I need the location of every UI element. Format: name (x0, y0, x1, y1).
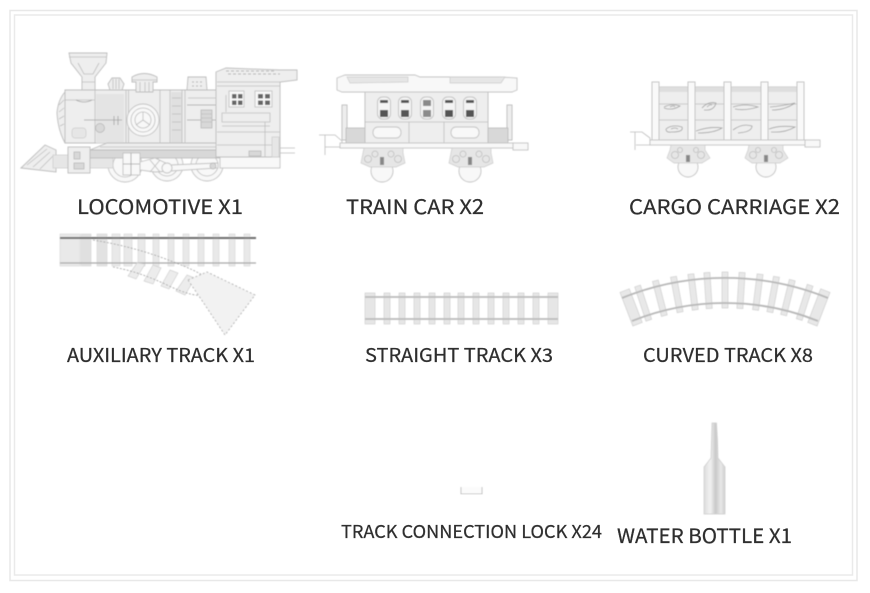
label: locomotive: LOCOMOTIVE X1 (77, 191, 243, 220)
wood grain swirls (664, 103, 795, 133)
icon: auxiliary track (60, 234, 256, 335)
label: straight track: STRAIGHT TRACK X3 (365, 341, 553, 368)
label: cargo carriage: CARGO CARRIAGE X2 (629, 191, 840, 220)
icon: water bottle (704, 423, 725, 514)
icon: cargo carriage (630, 82, 820, 177)
icon: track connection lock (461, 487, 482, 494)
icon: straight track (365, 293, 558, 324)
icon: train car (319, 75, 528, 182)
label: train car: TRAIN CAR X2 (346, 191, 484, 220)
label: auxiliary track: AUXILIARY TRACK X1 (67, 341, 255, 368)
windows (378, 97, 476, 119)
label: water bottle: WATER BOTTLE X1 (617, 520, 792, 549)
label: track connection lock: TRACK CONNECTION LOCK X24 (341, 518, 602, 544)
icon: locomotive (21, 53, 297, 182)
label: curved track: CURVED TRACK X8 (643, 341, 813, 368)
icon: curved track (620, 272, 830, 326)
